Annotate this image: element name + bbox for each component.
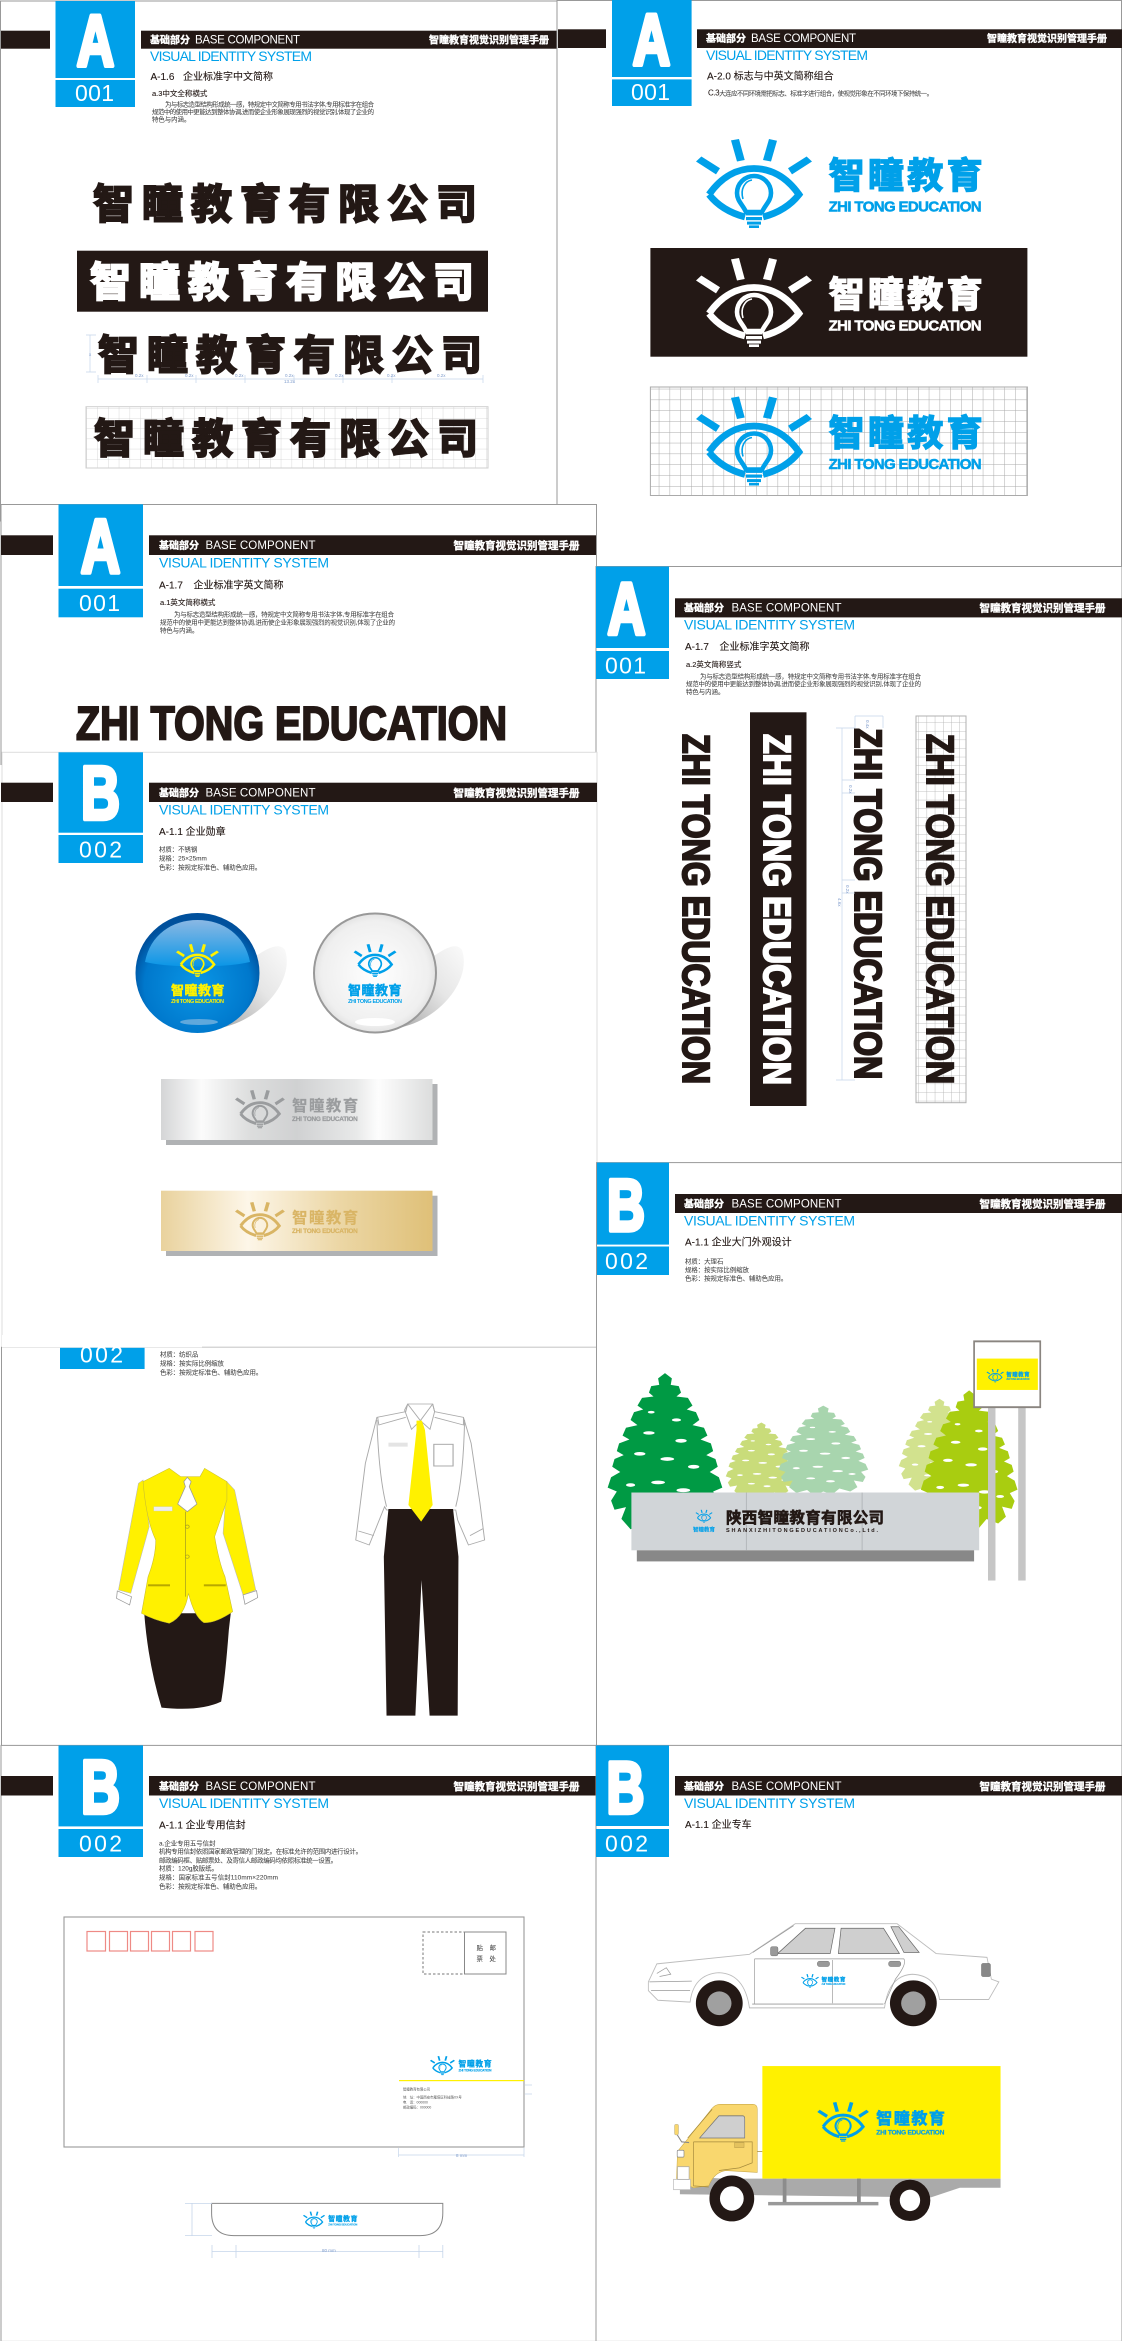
badge: blue [136, 913, 287, 1033]
panel: English vertical A-1.7 [596, 566, 1122, 1166]
envelope front: 8 mm [456, 2153, 468, 2158]
heading A-1.1: A-1.1 企业大门外观设计 [685, 1236, 792, 1248]
car [648, 1924, 999, 2026]
header block B 002: B [81, 1745, 120, 1829]
heading A-1.7: 企业标准字英文简称 [720, 640, 810, 653]
wordmark: with dimensions: x [89, 352, 92, 357]
wall company name: 陕西智瞳教育有限公司 [726, 1508, 884, 1527]
badge: blue: ZHI TONG EDUCATION [171, 999, 224, 1005]
envelope flap: 智瞳教育 [328, 2214, 358, 2223]
vertical wordmark: positive: ZHI TONG EDUCATION [674, 734, 716, 1084]
panel: English horizontal A-1.7 [1, 504, 596, 764]
wordmark: with dimensions: 0.2x [387, 373, 396, 378]
road sign: ZHI TONG EDUCATION [1006, 1378, 1030, 1381]
header block B 002 [1, 1745, 596, 1857]
road sign [974, 1341, 1040, 1581]
heading A-1.1: A-1.1 企业勋章 [159, 825, 226, 838]
badge: white [314, 914, 464, 1032]
header block A 001: 智瞳教育视觉识别管理手册 [429, 34, 549, 46]
header block A 001: 001 [75, 80, 114, 106]
logo: reversed on black: 智瞳教育 [829, 274, 983, 315]
body text: 为与标志造型结构形成统一感，特规定中文简称专用书法字体,专用标准字在组合 [174, 610, 395, 618]
header block B 002 [596, 1745, 1122, 1857]
header block A 001 [1, 504, 596, 617]
header block B 002: 基础部分 [684, 1780, 724, 1793]
header block A 001: A [608, 569, 645, 650]
sender address: 智瞳教育有限公司 [403, 2086, 430, 2092]
wordmark: with dimensions: 智瞳教育有限公司 [98, 332, 482, 378]
logo: reversed on black [650, 248, 1027, 357]
header block B 002: 002 [605, 1830, 648, 1856]
wordmark: with dimensions: 0.2x [437, 373, 446, 378]
header block A 001: BASE COMPONENT [195, 34, 300, 46]
body text: 特色与内涵。 [152, 114, 190, 124]
header block A 001: 001 [605, 652, 646, 678]
spec text: 邮政编码框、贴邮票处、及寄信人邮政编码均依照标准统一设置。 [159, 1856, 337, 1864]
header block A 001 [558, 0, 1122, 106]
spec text: 规格：按实际比例缩放 [160, 1358, 225, 1368]
vertical wordmark: with dimensions: 0.2x [848, 785, 853, 794]
road sign: 智瞳教育 [1006, 1370, 1030, 1378]
spec text [159, 1838, 362, 1890]
header block A 001: 基础部分 [684, 602, 724, 614]
header block A 001: 基础部分 [159, 539, 199, 552]
wordmark: with dimensions: 0.2x [135, 373, 144, 378]
header block B 002: 智瞳教育视觉识别管理手册 [980, 1780, 1106, 1793]
sender address [403, 2086, 462, 2110]
panel: badge A-1.1 [1, 751, 597, 1362]
envelope flap: ZHI TONG EDUCATION [328, 2222, 357, 2226]
wordmark: with dimensions: 0.2x [285, 373, 294, 378]
header block B 002: B [607, 1165, 645, 1247]
logo: blue: ZHI TONG EDUCATION [829, 198, 982, 216]
envelope front [64, 1917, 532, 2158]
spec text: 色彩：按规定标准色、辅助色应用。 [159, 862, 261, 872]
spec text: 色彩：按规定标准色、辅助色应用。 [685, 1274, 787, 1282]
English wordmark: ZHI TONG EDUCATION [76, 696, 507, 749]
logo: on grid [650, 387, 1027, 496]
wordmark: with dimensions: 0.2x [235, 373, 244, 378]
body text: 特色与内涵。 [686, 687, 724, 696]
body text: 为与标志造型结构形成统一感，特规定中文简称专用书法字体,专用标准字在组合 [700, 672, 922, 680]
name plate: gold [161, 1191, 438, 1256]
envelope flap: 80 mm [322, 2248, 336, 2253]
header block B 002: B [81, 751, 120, 835]
header block A 001 [1, 1, 558, 107]
vertical wordmark: with dimensions: 0.4x [865, 720, 870, 729]
envelope logo: 智瞳教育 [459, 2059, 492, 2069]
sender address: 邮政编码：000000 [403, 2104, 431, 2110]
header block B 002: 基础部分 [684, 1198, 724, 1210]
wordmark: with dimensions: 0.2x [185, 373, 194, 378]
subheading a.1: a.1英文简称横式 [160, 597, 216, 607]
logo: reversed on black: ZHI TONG EDUCATION [829, 318, 982, 334]
spec text: 机构专用信封依照国家邮政管理的门规定。在标准允许的范围内进行设计。 [159, 1846, 362, 1856]
subheading a.2: a.2英文简称竖式 [686, 659, 742, 669]
header block B 002: 基础部分 [159, 1780, 199, 1793]
spec text [159, 844, 261, 872]
header block B 002: 智瞳教育视觉识别管理手册 [454, 1780, 580, 1793]
body text: 规范中的使用中更能达到整体协调,进而使企业形象展现强烈的视觉识别,体现了企业的 [686, 679, 921, 688]
header block A 001: 智瞳教育视觉识别管理手册 [454, 539, 580, 552]
header block A 001: 基础部分 [706, 32, 746, 45]
postcode boxes [87, 1932, 213, 1951]
sender address: 电 话：000000 [403, 2100, 428, 2104]
wall logo [693, 1510, 716, 1534]
vertical wordmark: with dimensions: 0.2x [845, 885, 850, 894]
badge: white: ZHI TONG EDUCATION [348, 999, 402, 1005]
spec text: 色彩：按规定标准色、辅助色应用。 [159, 1882, 261, 1890]
number box 002 clipped: 002 [80, 1342, 123, 1368]
header block A 001: VISUAL IDENTITY SYSTEM [706, 47, 868, 63]
header block B 002: 002 [605, 1248, 648, 1274]
vertical wordmark: reversed [750, 712, 806, 1106]
body text [152, 100, 375, 124]
header block A 001: 智瞳教育视觉识别管理手册 [987, 32, 1107, 45]
heading A-2.0: A-2.0 标志与中英文简称组合 [707, 70, 834, 82]
heading A-1.6: A-1.6 [150, 72, 175, 83]
panel: gate design [596, 1163, 1122, 1763]
spec text: 材质：不锈钢 [159, 844, 197, 854]
stamp area [423, 1932, 506, 1974]
header block A 001: 001 [79, 590, 120, 616]
name plate: silver: ZHI TONG EDUCATION [292, 1116, 358, 1123]
stamp area: 邮 [490, 1943, 496, 1952]
logo: on grid: ZHI TONG EDUCATION [829, 456, 982, 473]
uniform: female [117, 1468, 258, 1709]
spec text: 规格：25×25mm [159, 854, 207, 862]
header block B 002: BASE COMPONENT [732, 1781, 842, 1793]
number box 002 clipped [2, 1335, 202, 1369]
header block B 002: B [607, 1748, 644, 1829]
header block A 001: A [633, 0, 670, 81]
spec text: 规格：国家标准五号信封110mm×220mm [159, 1872, 278, 1882]
header block A 001: BASE COMPONENT [206, 540, 316, 552]
heading A-1.7: 企业标准字英文简称 [194, 578, 284, 592]
vertical wordmark: with dimensions: ZHI TONG EDUCATION [846, 728, 888, 1079]
header block B 002: 基础部分 [159, 786, 199, 800]
panel: company vehicles [596, 1745, 1122, 2341]
envelope logo: ZHI TONG EDUCATION [459, 2069, 492, 2073]
header block B 002: 002 [79, 1830, 122, 1856]
spec text: 材质：纺织品 [160, 1350, 198, 1358]
header block A 001: VISUAL IDENTITY SYSTEM [150, 48, 312, 64]
body text [160, 610, 395, 634]
vertical wordmark: on grid: ZHI TONG EDUCATION [918, 734, 960, 1084]
car: 智瞳教育 [822, 1976, 846, 1984]
header block B 002 [1, 751, 597, 863]
header block A 001: A [77, 1, 114, 82]
wall logo: 智瞳教育 [693, 1526, 716, 1534]
panel: uniforms [2, 1335, 597, 1746]
vertical wordmark: with dimensions: 4.6x [837, 898, 842, 907]
name plate: gold: 智瞳教育 [292, 1208, 358, 1227]
spec text: 色彩：按规定标准色、辅助色应用。 [160, 1368, 262, 1376]
logo: on grid: 智瞳教育 [829, 412, 983, 454]
vertical wordmark: with dimensions [836, 716, 888, 1080]
truck: 智瞳教育 [876, 2109, 945, 2128]
body text: 为与标志造型结构形成统一感，特规定中文简称专用书法字体,专用标准字在组合 [165, 100, 375, 108]
wall company name [726, 1508, 884, 1534]
header block B 002: BASE COMPONENT [206, 788, 316, 800]
envelope logo [430, 2056, 492, 2075]
uniform: male [356, 1404, 485, 1716]
header block A 001: 基础部分 [150, 34, 190, 46]
spec text [685, 1256, 787, 1282]
name plate: gold: ZHI TONG EDUCATION [292, 1228, 358, 1235]
body text: C.3大连应不同环境需把标志、标准字进行组合，使视觉形象在不同环境下保持统一。 [708, 88, 933, 98]
header block B 002: BASE COMPONENT [732, 1198, 842, 1210]
subheading a.3: a.3中文全称横式 [152, 88, 208, 98]
header block B 002: 智瞳教育视觉识别管理手册 [980, 1198, 1106, 1210]
spec text: 材质：大理石 [685, 1256, 723, 1266]
wall company name: SHANXIZHITONGEDUCATIONCo.,Ltd. [726, 1528, 878, 1534]
header block A 001: 智瞳教育视觉识别管理手册 [980, 602, 1106, 614]
panel: envelope [1, 1745, 596, 2341]
wordmark: on grid: 智瞳教育有限公司 [94, 416, 478, 462]
badge: white: 智瞳教育 [348, 983, 402, 998]
stamp area: 贴 [476, 1943, 484, 1952]
header block B 002 [597, 1163, 1122, 1275]
logo: blue [696, 139, 983, 228]
wordmark: with dimensions: 13.2x [284, 379, 296, 384]
header block B 002: VISUAL IDENTITY SYSTEM [684, 1213, 855, 1229]
heading A-1.7: A-1.7 [685, 642, 709, 653]
header block A 001 [596, 566, 1122, 679]
spec text: 规格：按实际比例缩放 [685, 1265, 750, 1274]
header block A 001: 001 [631, 79, 670, 105]
body text: 规范中的使用中更能达到整体协调,进而使企业形象展现强烈的视觉识别,体现了企业的 [152, 107, 374, 116]
panel: logo combination A-2.0 [557, 0, 1122, 580]
spec text: a.企业专用五号信封 [159, 1838, 216, 1848]
badge: blue: 智瞳教育 [171, 983, 225, 998]
spec text [160, 1350, 262, 1376]
header block B 002: VISUAL IDENTITY SYSTEM [684, 1795, 855, 1811]
name plate: silver: 智瞳教育 [292, 1096, 358, 1115]
heading A-1.7: A-1.7 [159, 580, 183, 592]
header block A 001: A [81, 505, 120, 590]
heading A-1.1: A-1.1 企业专车 [685, 1818, 752, 1831]
stamp area: 处 [490, 1954, 496, 1963]
car: ZHI TONG EDUCATION [822, 1983, 846, 1986]
header block B 002: 002 [79, 836, 122, 862]
heading A-1.1: A-1.1 企业专用信封 [159, 1818, 246, 1832]
wordmark: with dimensions: 0.2x [335, 373, 344, 378]
trees [608, 1373, 1018, 1534]
spec text: 材质：120g胶版纸。 [159, 1864, 218, 1872]
heading A-1.6: 企业标准字中文简称 [183, 70, 273, 83]
body text: 规范中的使用中更能达到整体协调,进而使企业形象展现强烈的视觉识别,体现了企业的 [160, 618, 395, 626]
vertical wordmark: reversed: ZHI TONG EDUCATION [755, 734, 797, 1085]
logo: blue: 智瞳教育 [829, 155, 983, 196]
header block A 001: VISUAL IDENTITY SYSTEM [159, 554, 329, 570]
wordmark: positive: 智瞳教育有限公司 [93, 182, 477, 228]
name plate: silver [161, 1079, 438, 1145]
body text [686, 672, 922, 696]
header block A 001: BASE COMPONENT [751, 33, 856, 45]
header block B 002: BASE COMPONENT [206, 1781, 316, 1793]
header block B 002: VISUAL IDENTITY SYSTEM [159, 1795, 329, 1811]
header block B 002: VISUAL IDENTITY SYSTEM [159, 802, 329, 818]
sender address: 地 址：中国西安市雁塔区科技路XX号 [403, 2094, 462, 2100]
body text: 特色与内涵。 [160, 626, 198, 634]
stamp area: 票 [476, 1955, 484, 1963]
header block A 001: VISUAL IDENTITY SYSTEM [684, 617, 855, 633]
entrance wall [631, 1493, 979, 1561]
truck: ZHI TONG EDUCATION [876, 2129, 945, 2136]
wordmark: reversed on black: 智瞳教育有限公司 [90, 260, 474, 306]
envelope flap [185, 2203, 443, 2258]
panel: Chinese full name A-1.6 [0, 1, 558, 521]
header block A 001: BASE COMPONENT [732, 602, 842, 614]
truck [673, 2066, 1001, 2221]
header block B 002: 智瞳教育视觉识别管理手册 [454, 786, 580, 800]
